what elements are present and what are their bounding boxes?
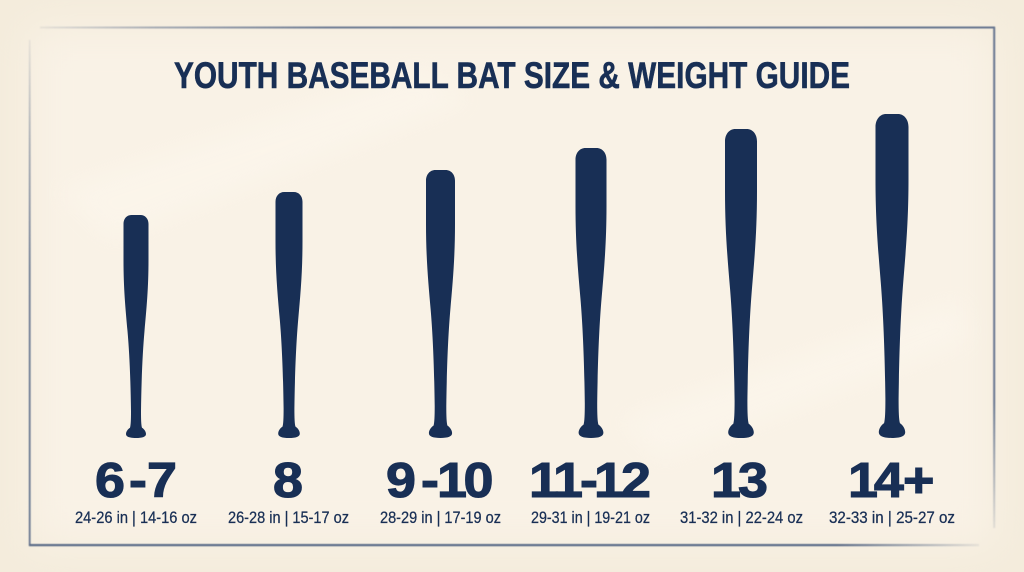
column: ages 6-7 (75, 215, 197, 527)
bat: ages 11-12 (576, 148, 606, 438)
size and weight 6-7: 24-26 in | 14-16 oz (75, 509, 197, 527)
bat: ages 6-7 (124, 215, 148, 438)
bat: ages 14+ (876, 114, 908, 438)
age label 14+: 14+ (848, 452, 934, 507)
age label 8: 8 (273, 452, 303, 507)
bat: age 13 (725, 129, 757, 438)
age label 6-7: 6-7 (95, 452, 177, 507)
column: age 8 (228, 192, 349, 527)
size and weight 11-12: 29-31 in | 19-21 oz (531, 509, 650, 527)
paper streaks (60, 70, 970, 460)
column: ages 14+ (829, 114, 955, 527)
bat: age 8 (276, 192, 302, 438)
column: ages 11-12 (529, 148, 651, 527)
size and weight 8: 26-28 in | 15-17 oz (228, 509, 349, 527)
age label 9-10: 9-10 (386, 452, 494, 507)
bat: ages 9-10 (426, 170, 455, 438)
title: YOUTH BASEBALL BAT SIZE & WEIGHT GUIDE (174, 55, 850, 96)
size and weight 9-10: 28-29 in | 17-19 oz (380, 509, 501, 527)
column: age 13 (680, 129, 803, 527)
size and weight 13: 31-32 in | 22-24 oz (680, 509, 803, 527)
age label 13: 13 (711, 452, 768, 507)
size and weight 14+: 32-33 in | 25-27 oz (829, 509, 955, 527)
column: ages 9-10 (380, 170, 501, 527)
age label 11-12: 11-12 (529, 452, 651, 507)
